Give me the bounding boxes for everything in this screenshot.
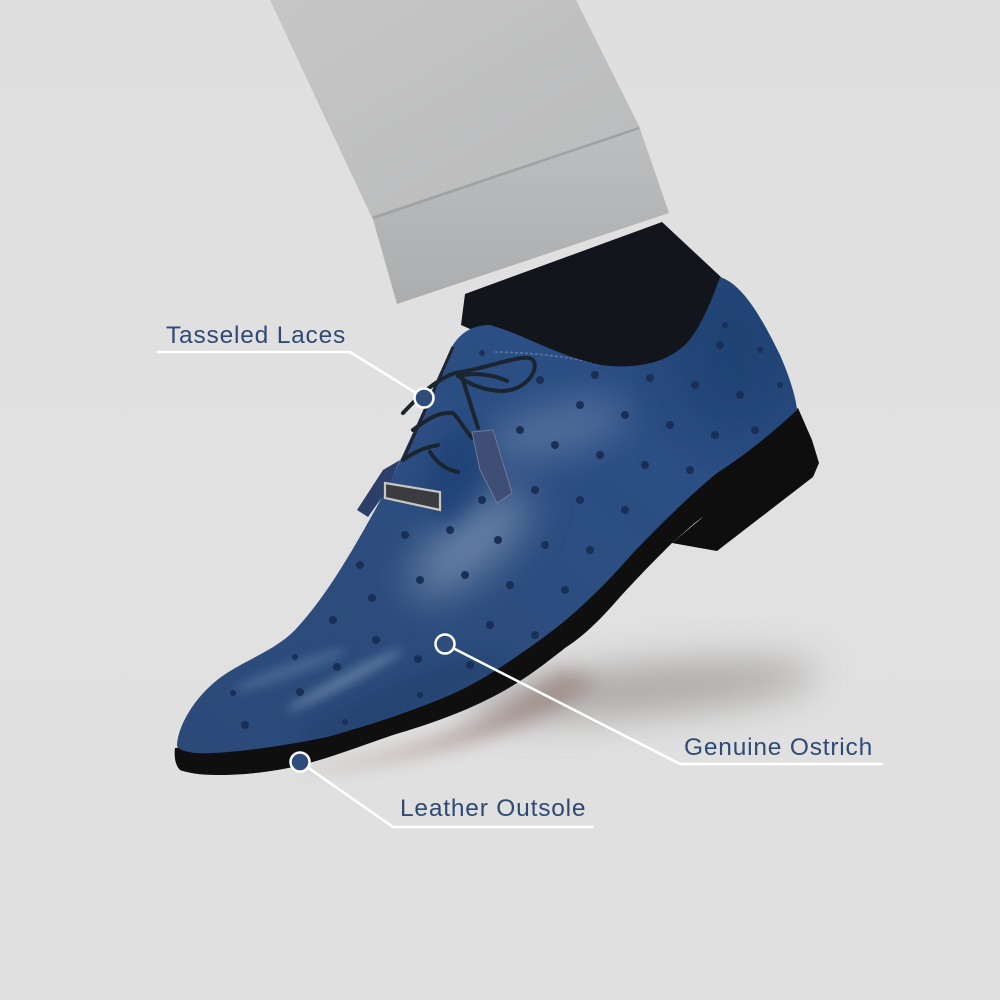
shoe shadow	[300, 650, 821, 772]
lace strands	[403, 358, 535, 472]
callout: Leather Outsole	[290, 752, 593, 827]
shoe	[170, 270, 819, 775]
leather outsole	[175, 465, 720, 775]
callout: Genuine Ostrich	[436, 634, 883, 764]
heel	[672, 408, 819, 551]
ostrich upper	[170, 270, 810, 760]
trouser leg	[270, 0, 669, 304]
tasseled laces	[357, 347, 535, 517]
callout: Genuine Ostrich: Genuine Ostrich	[684, 734, 873, 761]
trouser cuff	[372, 126, 669, 304]
eyelet facing gap	[403, 347, 453, 460]
callout: Tasseled Laces	[157, 322, 434, 408]
black sock	[461, 222, 722, 375]
callout: Tasseled Laces: Tasseled Laces	[166, 322, 346, 349]
callout: Leather Outsole: Leather Outsole	[400, 795, 586, 822]
quill bumps	[230, 322, 783, 729]
tassels	[472, 430, 512, 503]
metal lace tip	[385, 483, 440, 510]
